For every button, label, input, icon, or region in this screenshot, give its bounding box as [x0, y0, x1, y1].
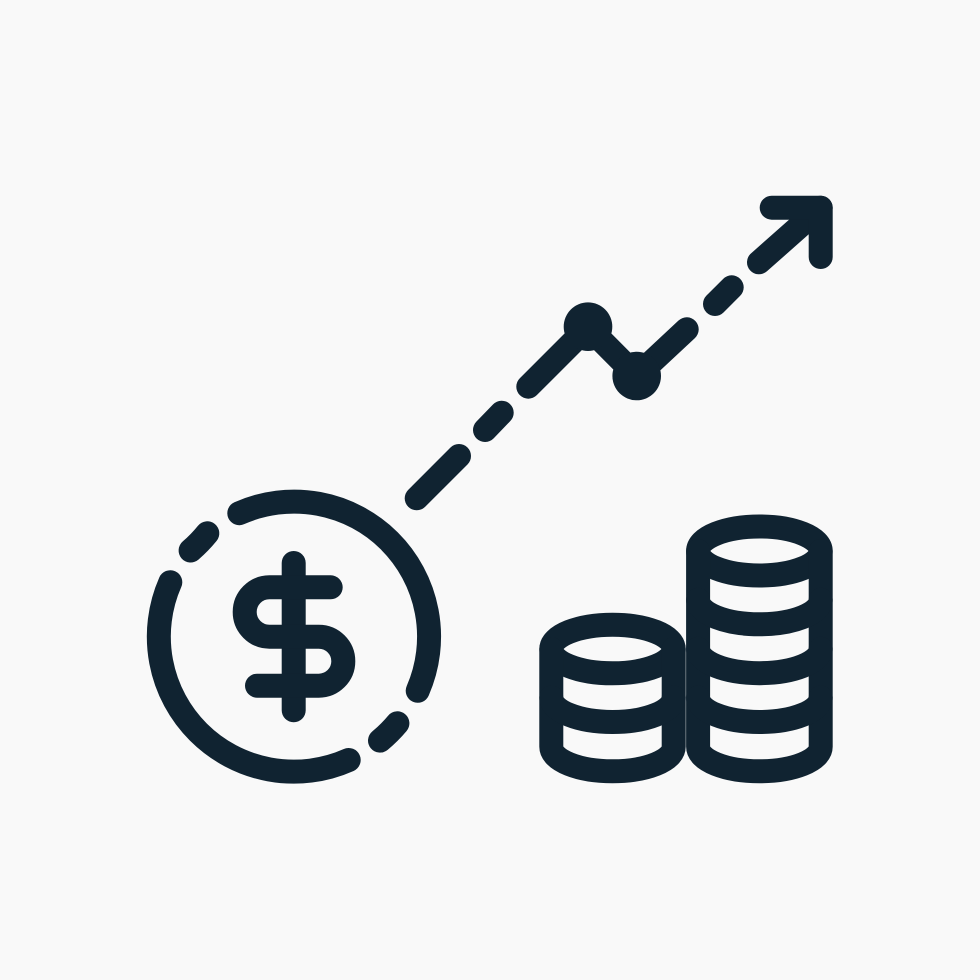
arrow: dashed rising trend line: [417, 208, 821, 498]
icon: dollar sign: [245, 563, 343, 710]
icon: short coin stack: [551, 625, 674, 771]
icon: tall coin stack: [698, 526, 821, 771]
icon: trend point low: [612, 352, 661, 400]
icon: dashed coin circle: [159, 502, 429, 772]
icon: trend point high: [564, 302, 612, 351]
